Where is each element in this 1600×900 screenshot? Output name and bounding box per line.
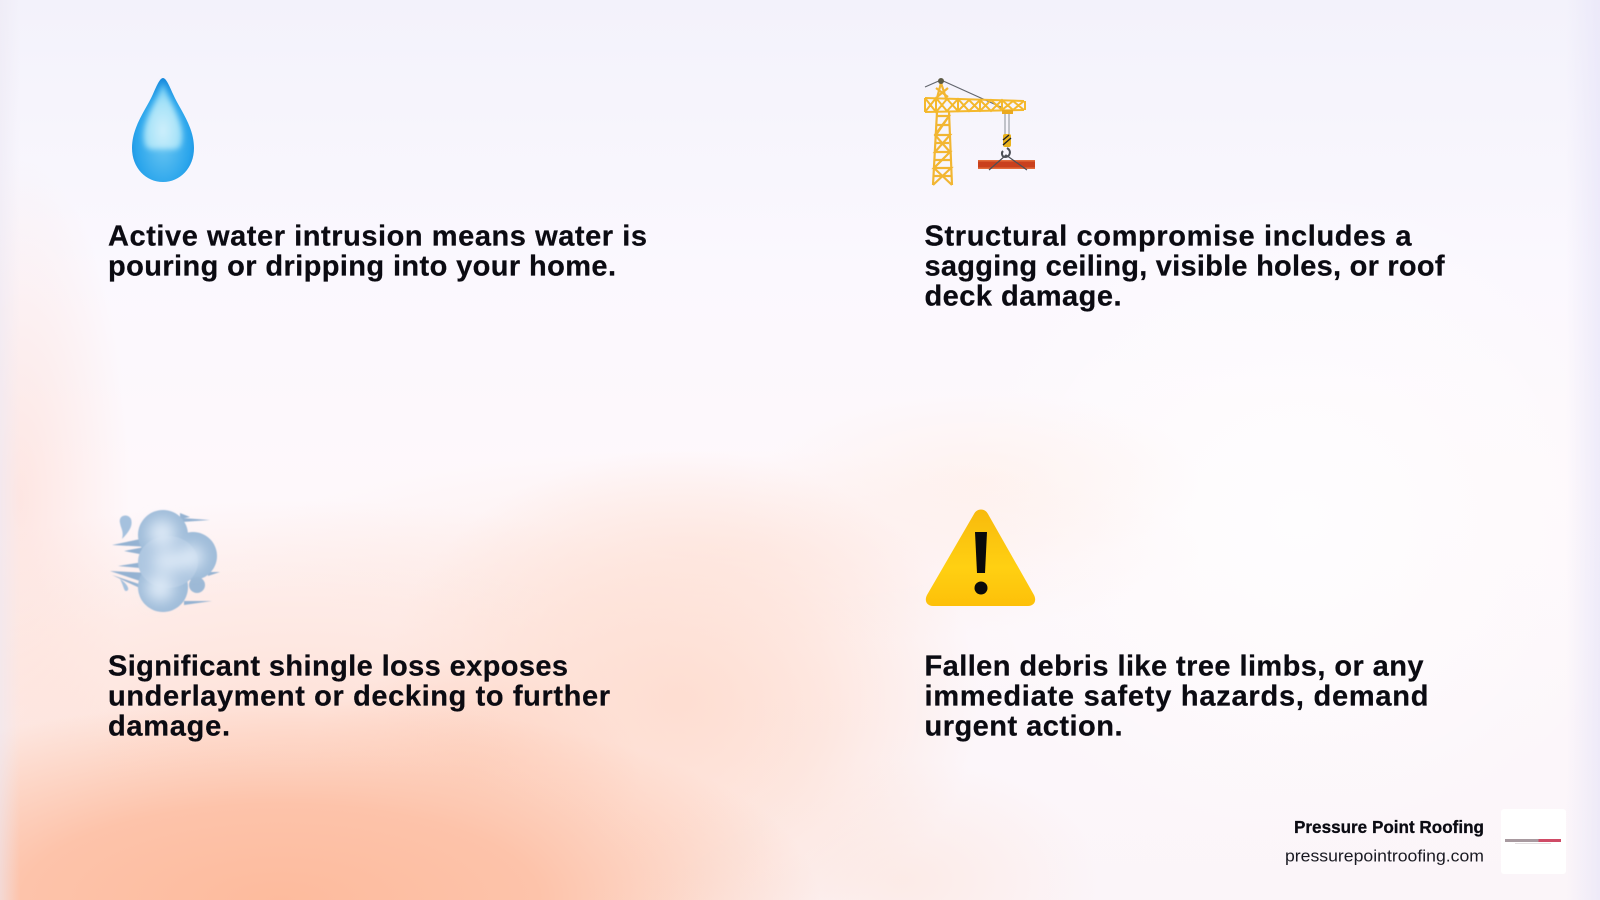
panel: structural compromise bbox=[924, 78, 1445, 312]
icon: construction crane bbox=[924, 78, 1035, 186]
text: debris and hazards: urgent action. bbox=[924, 710, 1122, 742]
text: structural compromise: deck damage. bbox=[924, 280, 1122, 312]
footer: brand bbox=[1285, 809, 1566, 874]
text: water intrusion bbox=[108, 220, 647, 282]
panel: debris and safety hazards bbox=[924, 510, 1428, 742]
panel: shingle loss bbox=[108, 509, 610, 742]
text: structural compromise: sagging ceiling, visible holes, or roof bbox=[924, 250, 1445, 282]
icon: wind puff bbox=[110, 509, 220, 613]
brand name and website: Pressure Point Roofing bbox=[1294, 817, 1484, 837]
text: debris and hazards: Fallen debris like tree limbs, or any bbox=[924, 650, 1424, 682]
text: debris and hazards bbox=[924, 650, 1428, 742]
text: structural compromise bbox=[924, 220, 1445, 312]
panel: active water intrusion bbox=[108, 78, 647, 282]
text: shingle loss: underlayment or decking to further bbox=[108, 680, 610, 712]
text: structural compromise: Structural compromise includes a bbox=[924, 220, 1412, 252]
text: shingle loss: Significant shingle loss exposes bbox=[108, 650, 568, 682]
text: water intrusion: Active water intrusion means water is bbox=[108, 220, 647, 252]
text: shingle loss bbox=[108, 650, 610, 742]
brand name and website bbox=[1285, 817, 1484, 866]
text: water intrusion: pouring or dripping into your home. bbox=[108, 250, 616, 282]
text: shingle loss: damage. bbox=[108, 710, 230, 742]
text: debris and hazards: immediate safety hazards, demand bbox=[924, 680, 1428, 712]
logo bbox=[1501, 809, 1566, 874]
icon: water drop bbox=[132, 78, 194, 182]
brand name and website: pressurepointroofing.com bbox=[1285, 846, 1484, 866]
icon: warning sign bbox=[926, 510, 1036, 606]
